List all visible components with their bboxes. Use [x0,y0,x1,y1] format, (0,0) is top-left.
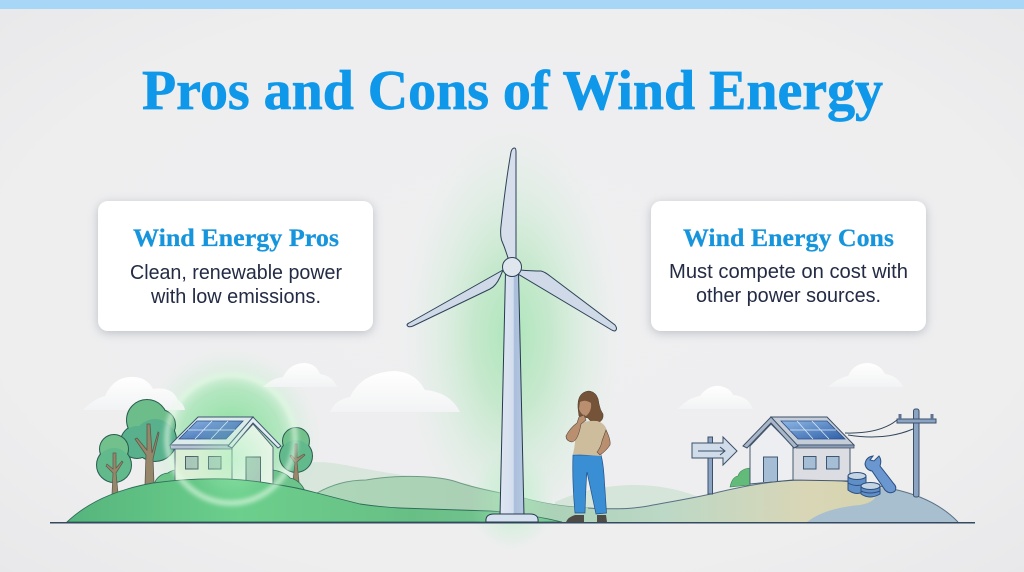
pros text: Clean, renewable power [130,262,342,284]
power pole and wires [845,409,936,497]
windows and door [186,456,260,486]
big tree [121,400,176,485]
title: Pros and Cons of Wind Energy [142,60,883,122]
panel: pros [98,201,373,331]
right house [730,417,854,487]
back hills [290,462,706,522]
roof [771,417,854,445]
panel: cons [651,201,926,331]
direction sign [692,437,737,494]
tower [500,272,524,516]
small left tree [97,435,131,494]
arms [566,415,610,455]
turbine glow [400,117,624,553]
walls [750,424,793,484]
right hill [523,480,958,522]
solar panel [781,421,845,439]
blade left [407,270,503,327]
hair [578,391,603,423]
clouds [83,363,903,412]
shoes [566,515,607,522]
wind turbine [407,148,616,522]
walls [175,447,232,484]
tower glow over hill [470,450,554,550]
windows and door [764,456,839,482]
pros heading: Wind Energy Pros [133,225,339,252]
roof [170,417,253,445]
face [579,401,591,416]
cons heading: Wind Energy Cons [683,225,894,252]
wrench icon [865,456,896,493]
left trees [97,400,312,494]
pros text: with low emissions. [150,286,321,308]
left green hill [67,479,562,522]
person [566,391,610,522]
house glow [139,347,323,531]
trousers [573,455,606,514]
bush [730,468,750,487]
base [486,514,538,522]
hub [502,258,522,276]
cons text: other power sources. [696,285,881,307]
bushes [154,470,305,491]
coin stacks [848,472,880,497]
blade up [501,148,516,258]
solar panel [179,421,243,439]
ground line [50,522,975,524]
top accent band [0,0,1024,9]
small right tree [280,428,312,482]
left house [154,417,305,491]
glow ring over hill [167,375,295,503]
blade right [518,270,616,331]
cons text: Must compete on cost with [669,261,908,283]
torso [573,421,609,456]
